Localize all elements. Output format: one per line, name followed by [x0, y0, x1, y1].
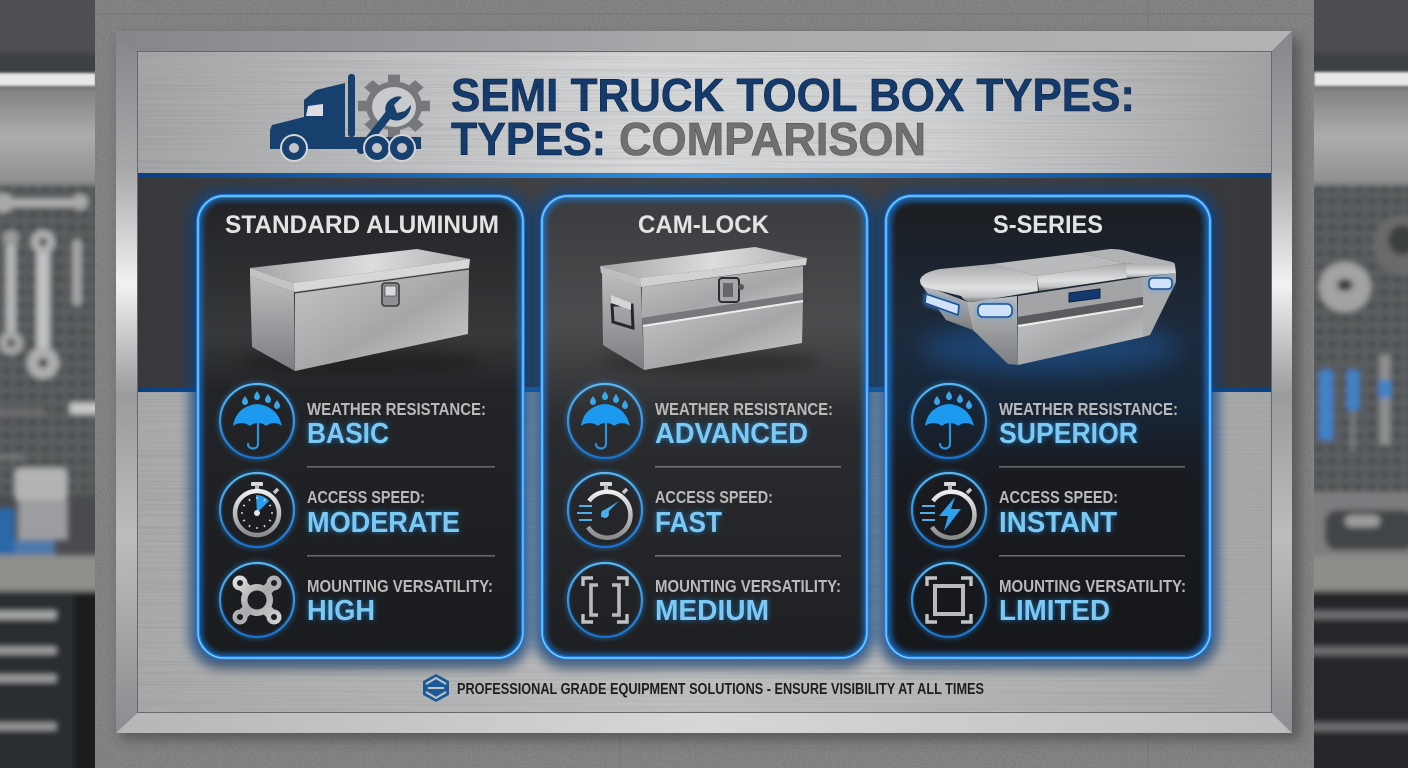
metric: weather resistance superior: SUPERIOR: [999, 418, 1138, 450]
metric: access speed moderate: MODERATE: [307, 507, 460, 539]
metric: weather resistance basic: BASIC: [307, 418, 389, 450]
metric: mounting versatility limited: MOUNTING VERSATILITY:: [999, 576, 1186, 596]
metric: weather resistance basic: [219, 383, 486, 459]
metric: mounting versatility medium: MOUNTING VERSATILITY:: [655, 576, 841, 596]
title: SEMI TRUCK TOOL BOX TYPES:: [451, 69, 1135, 121]
metric: weather resistance advanced: ADVANCED: [655, 418, 808, 450]
title: TYPES:: [451, 113, 606, 165]
metric: access speed moderate: ACCESS SPEED:: [307, 487, 425, 507]
illustration: s-series box: [920, 249, 1180, 374]
metal frame: [116, 31, 1292, 733]
metric: weather resistance advanced: [567, 383, 833, 459]
icon: footer logo: [423, 674, 449, 702]
metric: mounting versatility limited: LIMITED: [999, 595, 1110, 627]
metric: weather resistance superior: WEATHER RESISTANCE:: [999, 399, 1178, 419]
panel: s-series: [878, 190, 1218, 668]
metric: access speed instant: INSTANT: [999, 507, 1117, 539]
title: [451, 69, 1135, 165]
panel: standard aluminum: [190, 190, 530, 668]
metric: mounting versatility limited: [911, 562, 1186, 638]
metric: weather resistance advanced: WEATHER RESISTANCE:: [655, 399, 833, 419]
background: blurred garage right: [1305, 0, 1408, 768]
metric: access speed fast: FAST: [655, 507, 722, 539]
metric: access speed instant: [911, 472, 1118, 548]
metric: mounting versatility medium: MEDIUM: [655, 595, 769, 627]
sign shadow: [120, 38, 1300, 740]
metric: access speed fast: [567, 472, 773, 548]
metric: weather resistance basic: WEATHER RESISTANCE:: [307, 399, 486, 419]
illustration: standard aluminum box: [240, 249, 480, 374]
heading: standard aluminum: STANDARD ALUMINUM: [225, 211, 499, 239]
heading: cam-lock: CAM-LOCK: [638, 211, 769, 239]
icon: truck with gear and wrench: [270, 74, 430, 162]
title: COMPARISON: [619, 113, 926, 165]
metric: access speed moderate: [219, 472, 460, 548]
metric: mounting versatility high: HIGH: [307, 595, 375, 627]
metric: access speed fast: ACCESS SPEED:: [655, 487, 773, 507]
panel: cam-lock: [534, 190, 874, 668]
metric: weather resistance superior: [911, 383, 1178, 459]
metric: mounting versatility high: MOUNTING VERSATILITY:: [307, 576, 493, 596]
illustration: cam-lock box: [600, 247, 820, 373]
metric: access speed instant: ACCESS SPEED:: [999, 487, 1118, 507]
backing plate: [138, 52, 1271, 712]
heading: s-series: S-SERIES: [993, 211, 1103, 239]
footer text: PROFESSIONAL GRADE EQUIPMENT SOLUTIONS - ENSURE VISIBILITY AT ALL TIMES: [457, 681, 984, 698]
metric: mounting versatility medium: [567, 562, 841, 638]
background: blurred garage left: [0, 0, 105, 768]
metric: mounting versatility high: [219, 562, 493, 638]
